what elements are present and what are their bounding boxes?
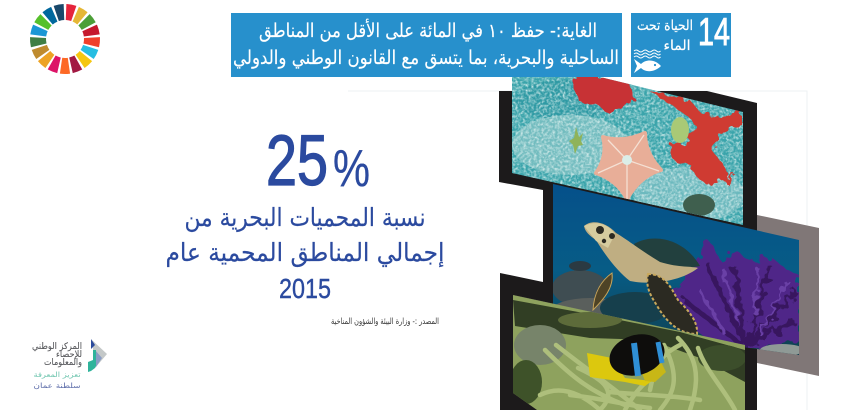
- reef floor: [553, 270, 604, 302]
- logo: national centre for statistics and information: المركز الوطني: [32, 342, 82, 352]
- logo: national centre for statistics and information: تعزيز المعرفة: [34, 371, 81, 379]
- target banner: الغاية:- حفظ ١٠ في المائة على الأقل من المناطق: [259, 19, 597, 42]
- logo mark: [88, 339, 107, 372]
- headline figure 25%: %: [333, 140, 370, 198]
- headline figure 25%: 25: [266, 122, 328, 201]
- anemone tentacles: [540, 338, 735, 410]
- description text: إجمالي المناطق المحمية عام: [166, 238, 444, 268]
- goal 14 tile: الماء: [664, 38, 690, 54]
- photo: clownfish in anemone: [513, 295, 745, 410]
- photo: starfish on reef: [512, 76, 745, 227]
- faint panel border: [348, 91, 807, 410]
- starfish: [596, 133, 661, 199]
- logo: national centre for statistics and information: [32, 339, 107, 390]
- description text: [166, 203, 444, 304]
- small fish: [569, 261, 591, 271]
- icon: waves and fish: [634, 50, 661, 73]
- logo: national centre for statistics and information: للإحصاء: [56, 350, 82, 360]
- clownfish: [587, 334, 666, 386]
- goal 14 tile: [631, 11, 731, 77]
- turtle: [584, 222, 700, 334]
- description text: نسبة المحميات البحرية من: [184, 203, 426, 232]
- SDG colour wheel: [27, 1, 103, 77]
- source note: المصدر :- وزارة البيئة والشؤون المناخية: [331, 317, 439, 327]
- red coral: [570, 76, 742, 186]
- target banner: [231, 13, 622, 77]
- goal 14 tile: الحياة تحت: [637, 18, 693, 34]
- grey backing panel: [757, 215, 819, 376]
- target banner: الساحلية والبحرية، بما يتسق مع القانون الوطني والدولي: [233, 47, 619, 69]
- description text: 2015: [279, 273, 331, 304]
- logo: national centre for statistics and information: سلطنة عمان: [34, 382, 81, 390]
- flippers: [593, 273, 612, 310]
- purple coral: [672, 240, 799, 350]
- logo: national centre for statistics and information: والمعلومات: [44, 358, 82, 368]
- goal 14 tile: 14: [698, 11, 730, 54]
- black backing frame: [499, 91, 757, 410]
- photo: sea turtle and purple coral: [550, 184, 804, 356]
